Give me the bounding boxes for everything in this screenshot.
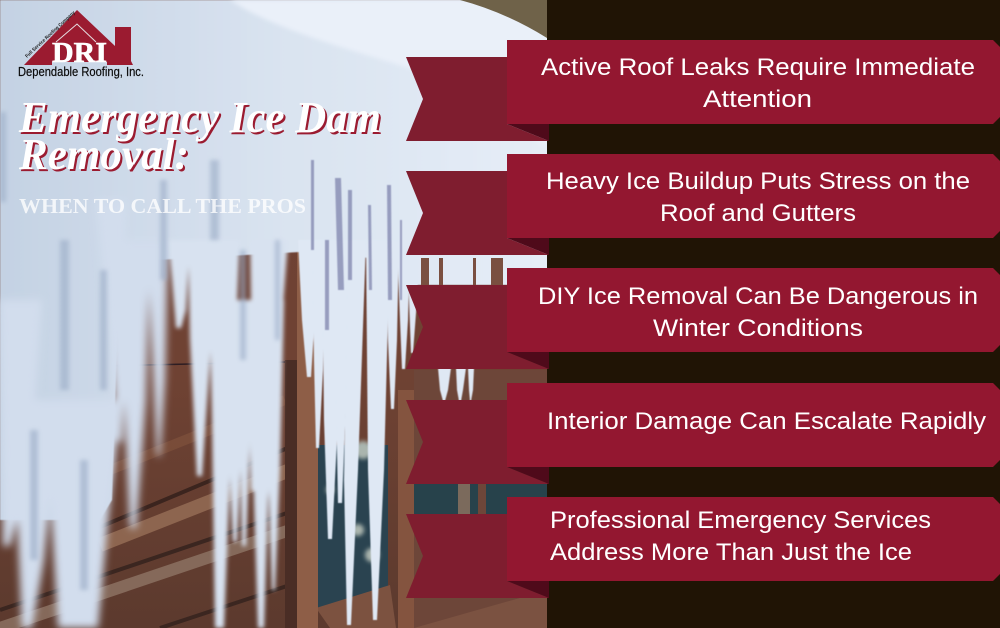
ribbon 5 text: Professional Emergency Services [550,507,931,534]
blurred foreground icicles [0,200,168,628]
ribbon 4 text: Interior Damage Can Escalate Rapidly [547,408,986,435]
ice mass and roof snow [0,0,548,520]
title: Emergency Ice Dam [20,95,383,144]
ribbon 3 text [538,283,978,342]
ribbon 2 text [546,168,970,227]
ribbon 1 [406,40,1000,141]
title: Removal: [20,132,191,181]
title [18,93,383,181]
ribbon 1 text [541,54,975,113]
logo letters DRI: DRI [52,37,107,69]
window [316,445,388,610]
subtitle: WHEN TO CALL THE PROS [19,194,306,218]
title: Removal: [18,130,189,179]
logo: Dependable Roofing [18,10,144,79]
title: Emergency Ice Dam [18,93,381,142]
ribbon 3 [406,268,1000,369]
ribbon 1 text: Attention [703,86,812,113]
logo roof [24,10,133,65]
ribbon 2 [406,154,1000,255]
ribbon 1 text: Active Roof Leaks Require Immediate [541,54,975,81]
ribbon 2 text: Roof and Gutters [660,200,856,227]
ribbon 4 [406,383,1000,484]
ribbon 2 text: Heavy Ice Buildup Puts Stress on the [546,168,970,195]
logo arc tagline: Full Service Roofing Company [24,10,77,59]
ribbon 5 text [550,507,931,566]
gaps behind the icicles between ribbons [421,258,503,285]
ribbon 3 text: Winter Conditions [653,315,863,342]
ribbon 5 [406,497,1000,598]
logo company name: Dependable Roofing, Inc. [18,65,144,79]
ribbon 5 text: Address More Than Just the Ice [550,539,912,566]
ice streaks [311,160,402,330]
ribbon 3 text: DIY Ice Removal Can Be Dangerous in [538,283,978,310]
